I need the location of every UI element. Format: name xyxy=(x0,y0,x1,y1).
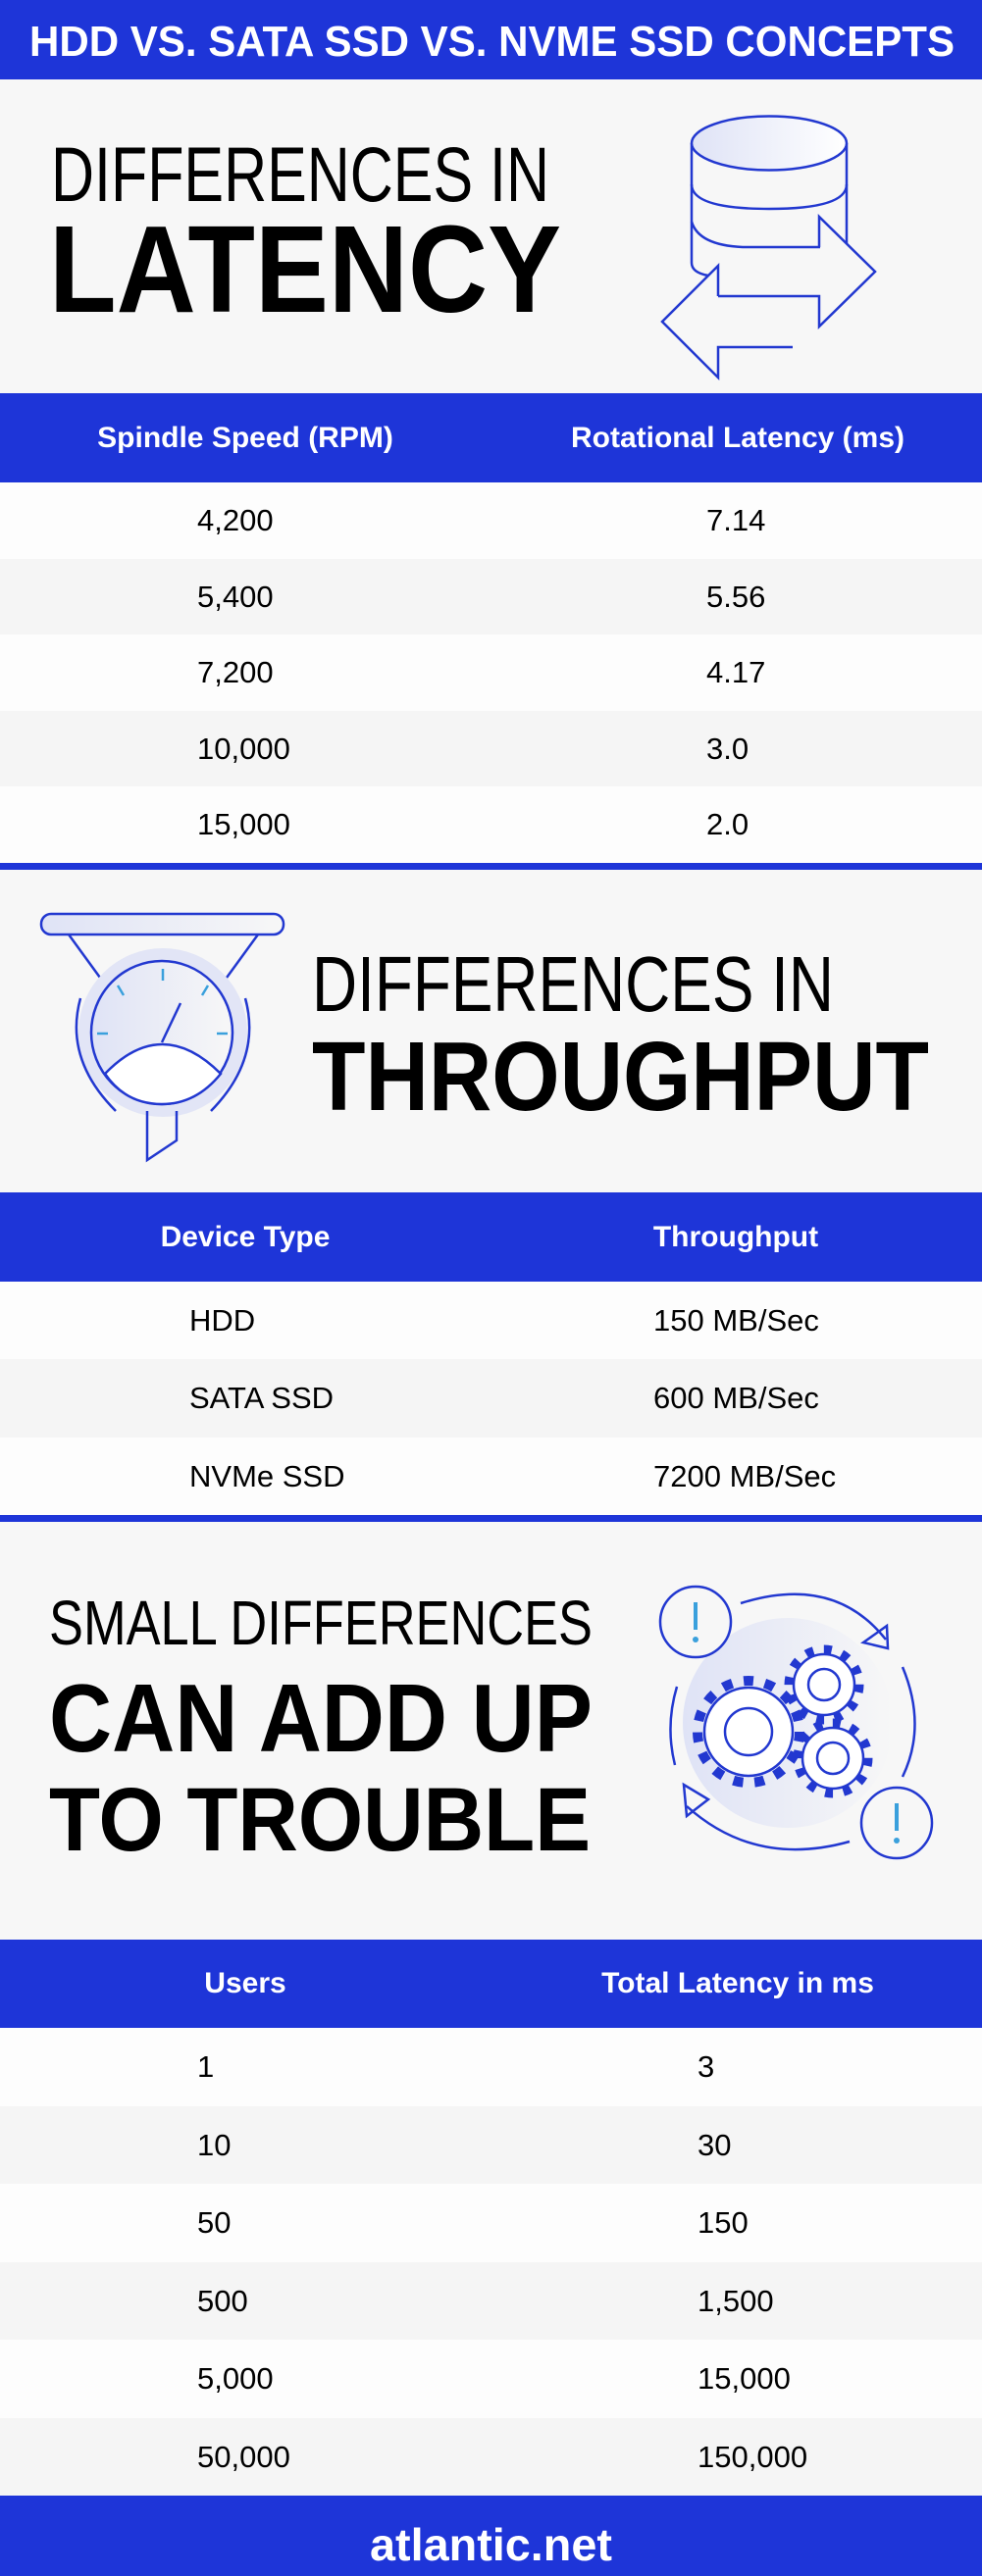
table: throughput rows: 150 MB/Sec xyxy=(653,1302,819,1338)
heading: small differences can add up to trouble: TO TROUBLE xyxy=(49,1770,591,1870)
heading: differences in latency: LATENCY xyxy=(49,200,561,338)
table: users rows: 1 xyxy=(197,2049,214,2084)
footer: atlantic.net logo xyxy=(0,2496,982,2576)
table: latency rows: 7,200 xyxy=(197,655,274,689)
table: users rows: 30 xyxy=(698,2128,731,2161)
table: throughput rows: 7200 MB/Sec xyxy=(653,1459,836,1492)
table: users rows: 150,000 xyxy=(698,2440,807,2473)
icon: database with arrows xyxy=(660,115,877,380)
title bar: HDD VS. SATA SSD VS. NVME SSD CONCEPTS xyxy=(29,18,955,66)
table header: latency: Rotational Latency (ms) xyxy=(571,422,904,453)
table header: throughput xyxy=(0,1192,982,1282)
heading: differences in latency xyxy=(49,130,561,338)
table header: users: Users xyxy=(204,1967,286,1999)
footer: atlantic.net logo: atlantic.net xyxy=(370,2519,612,2570)
table: latency rows: 4.17 xyxy=(706,655,765,689)
table: latency rows xyxy=(197,503,765,841)
table: latency rows: 10,000 xyxy=(197,732,290,765)
section: throughput heading xyxy=(39,912,929,1163)
table header: latency xyxy=(0,393,982,482)
table: users rows xyxy=(197,2049,807,2473)
icon: gears cycle xyxy=(659,1585,934,1859)
table: latency rows: 15,000 xyxy=(197,807,290,841)
heading: differences in throughput xyxy=(312,940,929,1132)
table: users rows: 50,000 xyxy=(197,2440,290,2473)
heading: small differences can add up to trouble xyxy=(49,1588,593,1870)
table: latency rows: 4,200 xyxy=(197,503,274,537)
table: throughput rows: HDD xyxy=(189,1302,255,1338)
heading: differences in throughput: DIFFERENCES IN xyxy=(312,940,834,1028)
table header: users: Total Latency in ms xyxy=(601,1967,874,1999)
icon: gauge xyxy=(39,912,284,1163)
section: latency heading xyxy=(49,115,877,380)
table: users rows: 50 xyxy=(197,2205,231,2240)
table: latency rows: 5,400 xyxy=(197,579,274,614)
title bar xyxy=(0,0,982,79)
table: users rows: 1,500 xyxy=(698,2283,774,2318)
table: users rows: 500 xyxy=(197,2283,248,2318)
table: users rows: 10 xyxy=(197,2128,231,2161)
table header: latency: Spindle Speed (RPM) xyxy=(97,422,393,453)
table: users rows: 3 xyxy=(698,2049,714,2084)
table: users rows: 5,000 xyxy=(197,2361,274,2396)
table: users rows: 150 xyxy=(698,2205,749,2240)
table: latency rows: 2.0 xyxy=(706,807,749,841)
table: latency rows: 3.0 xyxy=(706,732,749,765)
section: small differences heading xyxy=(49,1585,934,1870)
table header: throughput: Throughput xyxy=(653,1220,818,1253)
table: throughput rows: NVMe SSD xyxy=(189,1459,344,1492)
table: throughput rows xyxy=(189,1302,836,1492)
table: latency rows: 5.56 xyxy=(706,579,765,614)
table: users rows: 15,000 xyxy=(698,2361,791,2396)
table: throughput rows: SATA SSD xyxy=(189,1381,334,1415)
table header: users xyxy=(0,1940,982,2028)
table: throughput rows: 600 MB/Sec xyxy=(653,1381,819,1415)
table: latency rows: 7.14 xyxy=(706,503,765,537)
table header: throughput: Device Type xyxy=(161,1220,330,1253)
